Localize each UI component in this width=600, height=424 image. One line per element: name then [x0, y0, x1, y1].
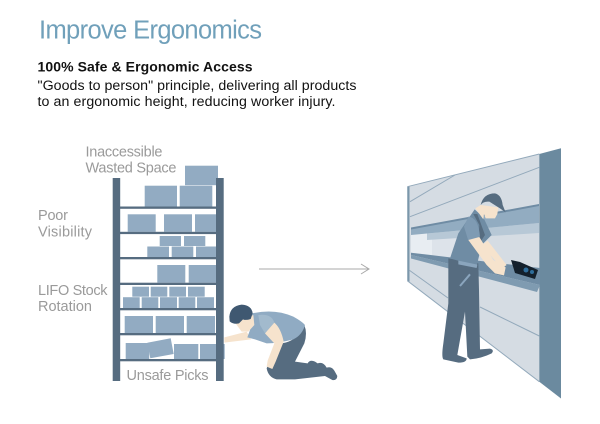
- panel: goods-to-person machine: [407, 148, 561, 398]
- label: unsafe picks: Unsafe Picks: [126, 368, 208, 384]
- label: poor visibility: [38, 208, 93, 241]
- label: LIFO stock rotation: Rotation: [38, 299, 92, 315]
- retrieved items: [511, 260, 538, 279]
- vest strap: [473, 214, 485, 245]
- panel: unsafe shelving rack: [113, 166, 225, 381]
- lower tray: [411, 253, 540, 292]
- text block: safe and ergonomic access: [38, 58, 356, 110]
- figure: standing worker: [442, 193, 507, 363]
- open bay: [411, 229, 476, 262]
- rack frame: [113, 178, 224, 381]
- left edge strip: [407, 186, 410, 282]
- subheading: 100% Safe & Ergonomic Access: [38, 58, 253, 74]
- shirt: [247, 311, 305, 343]
- machine panel lines: [407, 154, 539, 382]
- label: inaccessible wasted space: Wasted Space: [86, 161, 176, 177]
- figure: kneeling worker: [224, 305, 337, 380]
- head: [475, 205, 498, 219]
- hair: [229, 305, 253, 324]
- trousers and shoes: [267, 325, 337, 380]
- label: poor visibility: Visibility: [38, 225, 93, 241]
- side column: [539, 148, 561, 398]
- face: [235, 315, 254, 332]
- sleeve: [258, 315, 274, 333]
- label: inaccessible wasted space: Inaccessible: [86, 145, 162, 161]
- trousers and shoes: [442, 258, 493, 363]
- description line 1: "Goods to person" principle, delivering all products: [38, 78, 356, 94]
- far arm: [224, 332, 251, 343]
- label: inaccessible wasted space: [86, 145, 176, 177]
- description line 2: to an ergonomic height, reducing worker injury.: [38, 94, 336, 110]
- machine face: [407, 154, 539, 382]
- arms: [468, 237, 507, 275]
- label: LIFO stock rotation: [38, 283, 108, 315]
- pocket stripe: [460, 274, 470, 286]
- arrow: [259, 264, 369, 274]
- title: Improve Ergonomics: [39, 16, 262, 44]
- label: poor visibility: Poor: [38, 208, 68, 224]
- sleeve: [464, 217, 480, 241]
- label: LIFO stock rotation: LIFO Stock: [38, 283, 108, 299]
- near arm: [265, 323, 284, 369]
- rack boxes: [123, 166, 225, 359]
- upper tray: [411, 204, 539, 240]
- cap: [481, 193, 506, 212]
- shirt: [450, 209, 492, 266]
- belt: [458, 261, 477, 268]
